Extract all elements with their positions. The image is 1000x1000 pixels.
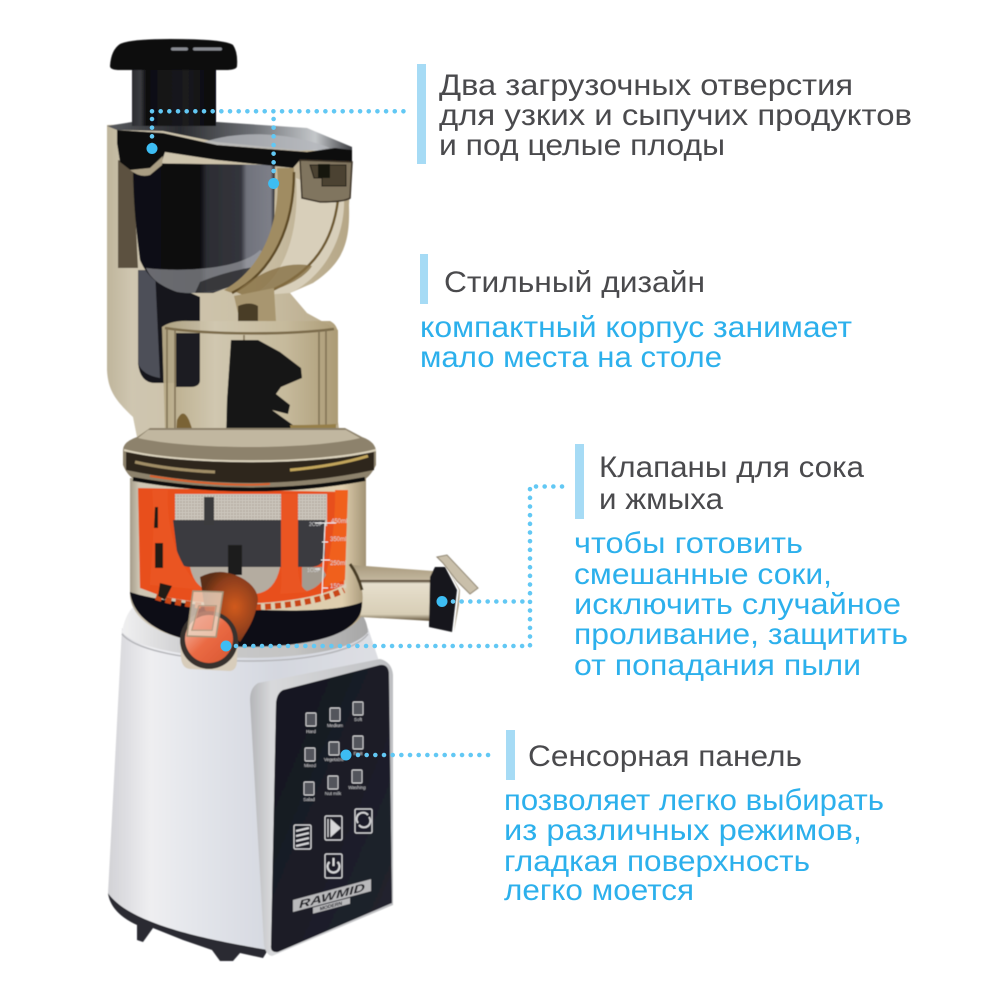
text block: touch panel: из различных режимов,	[504, 814, 862, 847]
text block: juice and pulp valves	[574, 444, 908, 682]
orange struts	[280, 494, 310, 594]
callout lines	[146, 111, 566, 761]
spout cap	[429, 567, 457, 632]
text block: juice and pulp valves: Клапаны для сока	[599, 451, 864, 484]
spout lid	[437, 555, 478, 594]
mode labels: Nut milk	[325, 791, 342, 796]
measuring scale: 1CUP	[307, 568, 321, 574]
lower chamber	[162, 321, 338, 432]
dark cup floor	[130, 592, 362, 647]
text block: juice and pulp valves: и жмыха	[599, 483, 723, 516]
frame teeth	[156, 590, 344, 607]
power button	[325, 854, 342, 878]
text block: stylish design: компактный корпус занимает	[420, 311, 852, 344]
measuring scale: 450ml	[331, 519, 347, 525]
front valve	[180, 572, 258, 671]
text block: touch panel: легко моется	[504, 874, 694, 907]
cup rim	[123, 428, 376, 491]
mode labels: Fruit	[354, 751, 363, 756]
text block: stylish design	[420, 254, 852, 374]
RAWMID logo: MODERN	[320, 901, 342, 913]
text block: two feed openings: Два загрузочных отверстия	[439, 69, 853, 102]
hopper	[107, 122, 352, 440]
inner dark column	[138, 270, 200, 383]
measuring scale: 2CUP	[309, 522, 323, 528]
black rim	[117, 130, 352, 173]
play button	[325, 816, 342, 840]
text block: stylish design: Стильный дизайн	[444, 266, 705, 299]
RAWMID logo	[293, 879, 371, 920]
inner dark block	[176, 333, 200, 387]
mode labels: Washing	[348, 785, 366, 790]
text block: two feed openings	[417, 64, 912, 164]
silver motor base	[108, 608, 392, 961]
text block: juice and pulp valves: исключить случайное	[574, 588, 901, 621]
mode labels: Medium	[327, 723, 343, 728]
callout: feed openings dotted line	[146, 111, 407, 189]
left hopper wall shade	[118, 160, 138, 268]
measuring scale	[307, 519, 347, 595]
text block: touch panel: гладкая поверхность	[504, 845, 810, 878]
centre neck and nut	[234, 288, 276, 322]
text block: touch panel	[504, 730, 884, 907]
menu button	[294, 825, 311, 849]
control panel	[250, 659, 393, 956]
lock box	[300, 160, 352, 202]
mode labels: Vegetable	[324, 757, 345, 762]
black funnel	[133, 163, 275, 293]
measuring scale: 250ml	[330, 561, 346, 567]
text block: two feed openings: для узких и сыпучих продуктов	[439, 99, 912, 132]
text block: two feed openings: и под целые плоды	[439, 129, 725, 162]
right clear chute	[250, 178, 344, 296]
orange frame	[138, 488, 347, 604]
measuring scale: 150ml	[330, 584, 346, 590]
spout	[350, 555, 478, 632]
mode icons	[304, 702, 363, 795]
mode labels	[303, 717, 366, 802]
strainer	[173, 494, 327, 594]
juice cup	[130, 478, 366, 647]
mode labels: Mixed	[304, 763, 316, 768]
text block: touch panel: позволяет легко выбирать	[504, 784, 884, 817]
refresh button	[355, 809, 372, 833]
RAWMID logo: RAWMID	[299, 882, 365, 911]
callout: valves dotted lines	[220, 486, 566, 652]
mode labels: Soft	[354, 717, 363, 722]
auger	[226, 340, 302, 440]
text block: juice and pulp valves: от попадания пыли	[574, 649, 861, 682]
hopper lid	[107, 122, 352, 176]
callout: touch panel dotted line	[340, 750, 492, 760]
text block: touch panel: Сенсорная панель	[528, 740, 802, 773]
mode labels: Salad	[303, 797, 315, 802]
text block: juice and pulp valves: смешанные соки,	[574, 558, 832, 591]
juicer product illustration	[107, 39, 478, 961]
text block: juice and pulp valves: чтобы готовить	[574, 527, 803, 560]
valve latch	[187, 591, 223, 637]
text block: stylish design: мало места на столе	[420, 341, 722, 374]
mode labels: Hard	[306, 729, 316, 734]
pusher	[110, 39, 237, 126]
frame slots	[154, 507, 172, 600]
measuring scale: 350ml	[330, 537, 346, 543]
text block: juice and pulp valves: проливание, защитить	[574, 618, 908, 651]
